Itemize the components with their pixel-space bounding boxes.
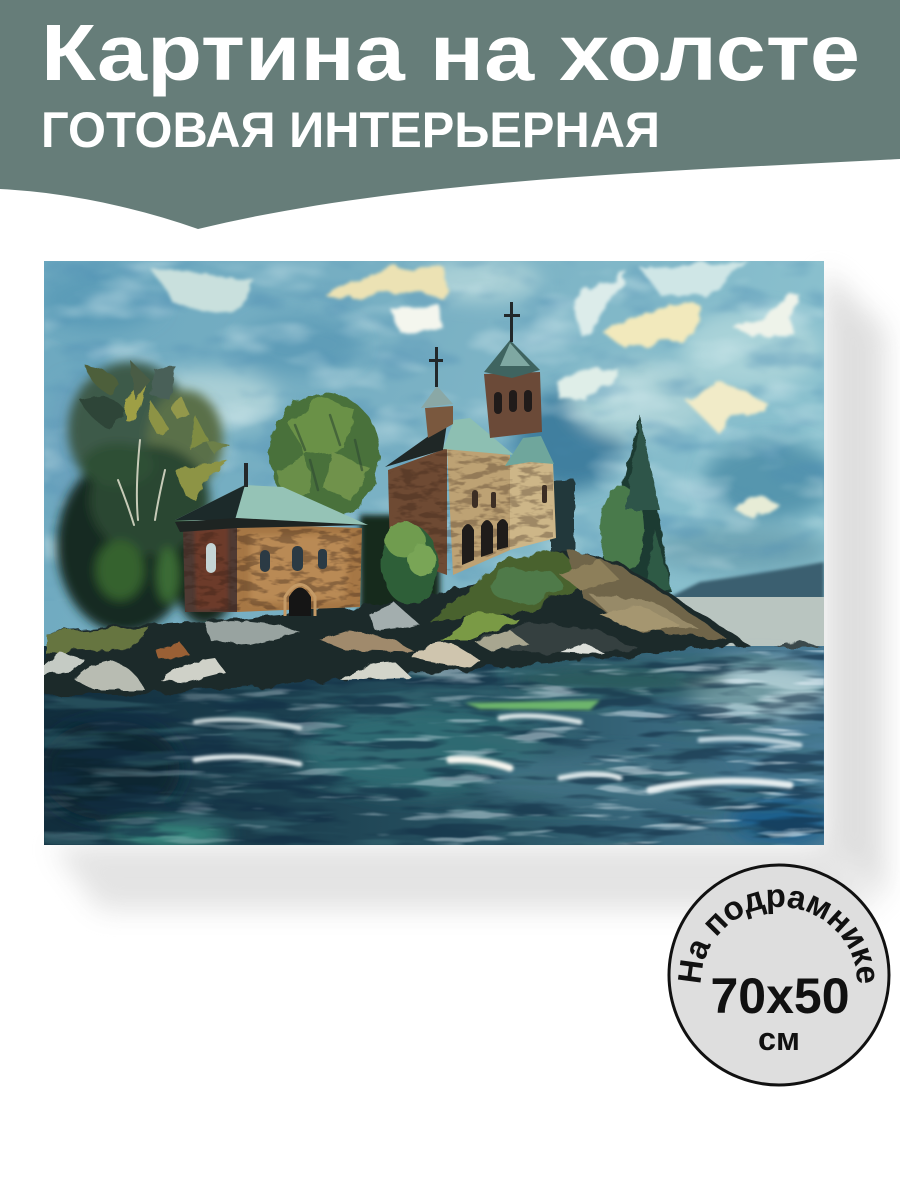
distant hill and far water bbox=[672, 560, 824, 646]
right pine bbox=[550, 415, 672, 592]
centre tree bbox=[270, 393, 440, 620]
header banner bbox=[0, 0, 900, 229]
title: Картина на холсте bbox=[41, 8, 860, 97]
canvas shadow bbox=[52, 268, 885, 910]
badge unit: см bbox=[758, 1021, 800, 1057]
small stone building bbox=[175, 463, 368, 616]
island and rocks bbox=[44, 548, 822, 695]
badge size: 70x50 bbox=[710, 968, 850, 1024]
painting: church on island bbox=[30, 258, 840, 856]
bell tower bbox=[484, 302, 542, 438]
subtitle: ГОТОВАЯ ИНТЕРЬЕРНАЯ bbox=[41, 102, 660, 158]
sky and clouds bbox=[40, 258, 835, 601]
size badge bbox=[668, 864, 890, 1086]
badge curved label: На подрамнике bbox=[678, 889, 874, 983]
small tower bbox=[421, 347, 453, 438]
water bbox=[30, 646, 840, 856]
left trees bbox=[57, 360, 235, 633]
church bbox=[382, 302, 560, 605]
